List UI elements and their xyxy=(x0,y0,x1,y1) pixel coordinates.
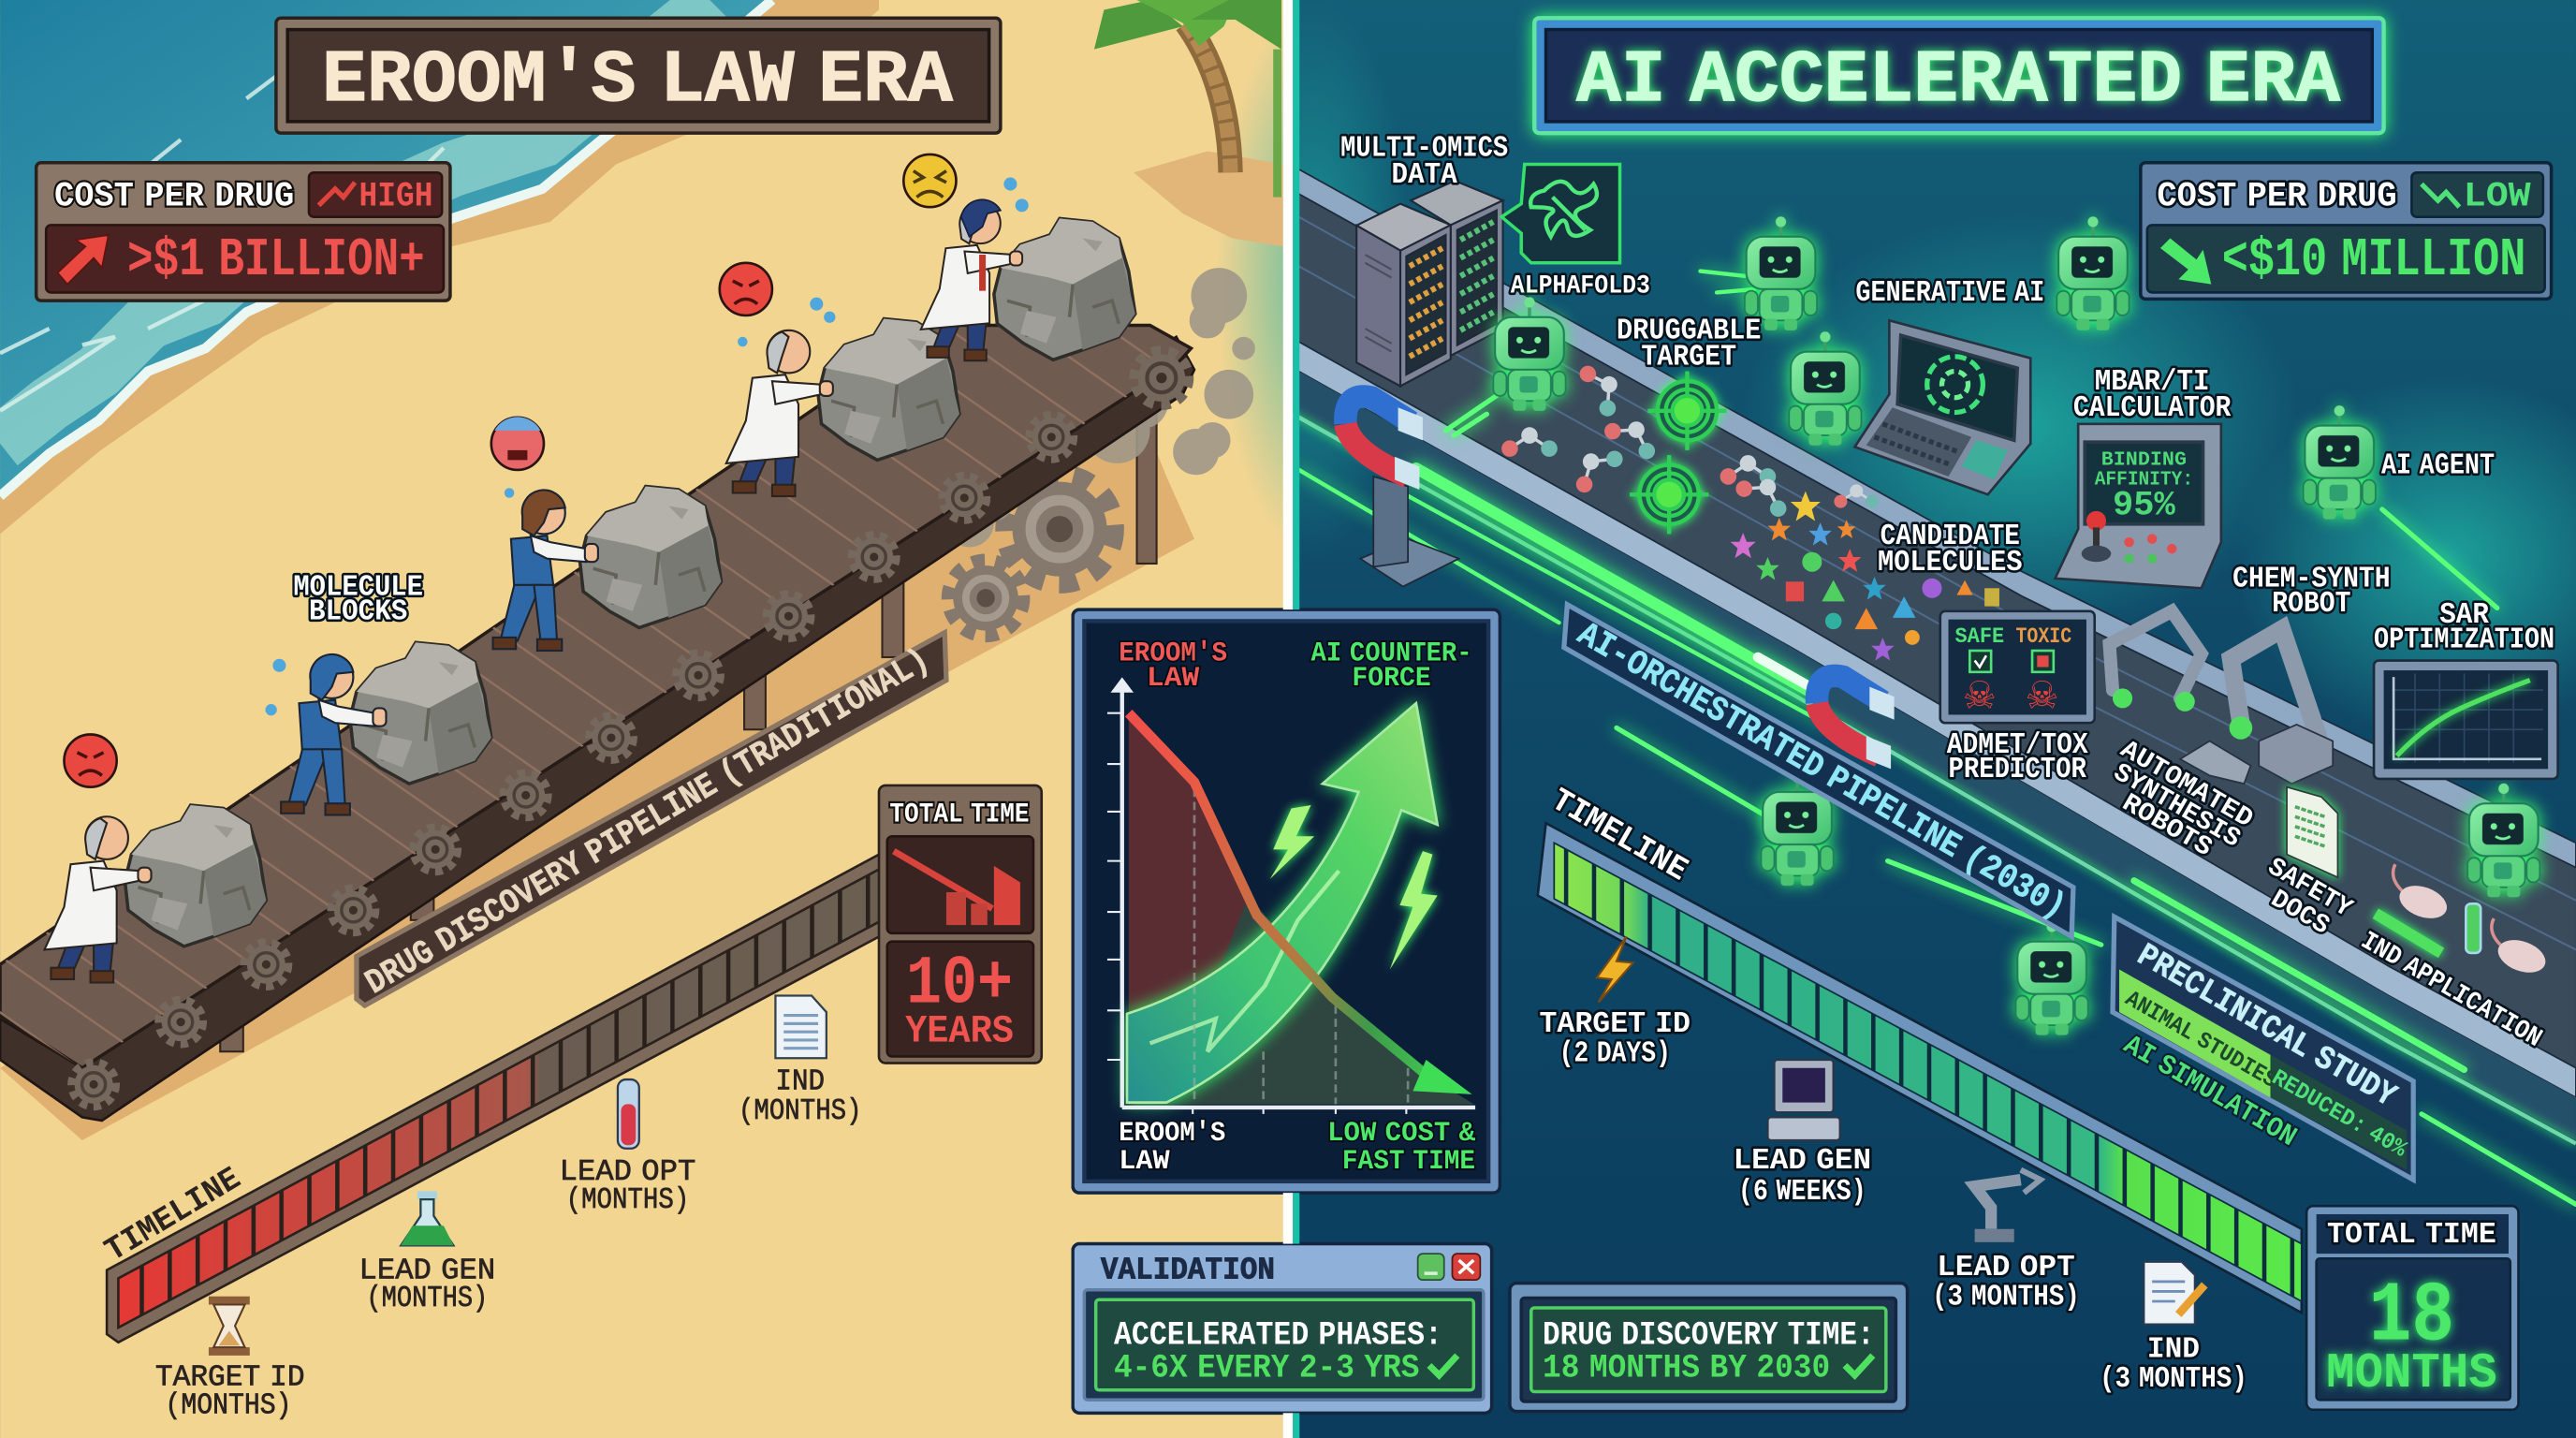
label: mbar/ti calculator xyxy=(2073,366,2231,425)
chart area: low cost fill xyxy=(1166,895,1473,1104)
title: eroom's law era: EROOM'S LAW ERA xyxy=(322,38,954,123)
icon: synthesis robot arms xyxy=(2110,611,2333,784)
chart labels: LAW xyxy=(1147,662,1199,694)
timeline: traditional: TIMELINE xyxy=(98,1160,247,1270)
panel: cost low: COST PER DRUG xyxy=(2157,177,2397,216)
label: ind months xyxy=(739,1066,862,1128)
conveyor belt surface xyxy=(0,325,1191,1068)
magnet post xyxy=(1360,477,1459,587)
label: chem-synth robot: CHEM-SYNTH xyxy=(2232,564,2391,596)
label: sar optimization: SAR xyxy=(2439,599,2489,632)
label: ind application: IND APPLICATION xyxy=(2355,927,2546,1054)
label: lead gen weeks xyxy=(1734,1145,1871,1209)
icon: alphafold3 protein xyxy=(1501,165,1620,263)
panel: cost high: COST PER DRUG xyxy=(54,177,294,216)
panel: total time AI: MONTHS xyxy=(2326,1345,2497,1401)
icon: flask xyxy=(401,1191,453,1245)
panel: cost low xyxy=(2141,163,2552,299)
label: lead gen weeks: (6 WEEKS) xyxy=(1738,1176,1866,1209)
panel: cost high: >$1 BILLION+ xyxy=(127,230,425,291)
molecules xyxy=(1501,356,1879,520)
label: target id months xyxy=(155,1361,305,1422)
support posts xyxy=(220,386,1157,1051)
workers pushing xyxy=(44,199,1022,983)
label: chem-synth robot xyxy=(2232,564,2391,621)
panel: total time traditional: YEARS xyxy=(905,1009,1014,1054)
icon: binding affinity calculator: AFFINITY: xyxy=(2095,469,2193,492)
chart labels: AI COUNTER- xyxy=(1311,638,1472,669)
label: lead gen weeks: LEAD GEN xyxy=(1734,1145,1871,1178)
icon: robot arm xyxy=(1975,1170,2041,1242)
label: ind months: (MONTHS) xyxy=(739,1095,862,1128)
sign: traditional pipeline: DRUG DISCOVERY PIPELINE (TRADITIONAL) xyxy=(359,641,937,1004)
robots xyxy=(1493,216,2539,1035)
chart labels: LOW COST & xyxy=(1327,1117,1475,1149)
label: ind months: IND xyxy=(2147,1334,2200,1367)
label: ind months: (3 MONTHS) xyxy=(2100,1363,2247,1396)
label: lead gen months: (MONTHS) xyxy=(366,1283,488,1315)
panel: cost curve chart xyxy=(1073,609,1500,1193)
conveyor side xyxy=(0,337,1194,1121)
magnets xyxy=(1345,397,1895,769)
label: target id months: TARGET ID xyxy=(155,1361,305,1394)
label: lead opt months: (MONTHS) xyxy=(566,1184,689,1217)
icon: safety docs xyxy=(2287,787,2337,877)
icon: green progress and tube xyxy=(2376,903,2481,953)
candidate molecules xyxy=(1731,492,1999,661)
chart area: eroom's law fill xyxy=(1129,713,1473,1104)
label: safety docs: SAFETY xyxy=(2262,853,2357,924)
chart labels: EROOM'S xyxy=(1119,638,1227,669)
label: admet tox predictor: PREDICTOR xyxy=(1949,754,2086,786)
label: automated synthesis robots: AUTOMATED xyxy=(2115,736,2258,834)
energy streaks xyxy=(1296,271,2576,1204)
panel: preclinical study: REDUCED: 40% xyxy=(2267,1065,2410,1164)
panel: total time AI: TOTAL TIME xyxy=(2327,1219,2496,1252)
icon: binding affinity calculator xyxy=(2056,424,2221,588)
label: automated synthesis robots: ROBOTS xyxy=(2116,789,2217,863)
rocks xyxy=(124,218,1135,946)
label: molecule blocks: BLOCKS xyxy=(309,596,407,629)
panel: total time AI: 18 xyxy=(2369,1269,2454,1365)
panel: cost high: HIGH xyxy=(359,177,433,216)
label: lead opt months xyxy=(1932,1252,2080,1313)
server racks xyxy=(1356,181,1503,386)
chart labels: FAST TIME xyxy=(1342,1145,1475,1177)
label: multi-omics data: MULTI-OMICS xyxy=(1340,133,1508,166)
label: lead opt months: LEAD OPT xyxy=(560,1156,695,1189)
sign: AI pipeline: AI-ORCHESTRATED PIPELINE (2030) xyxy=(1570,615,2072,928)
label: multi-omics data xyxy=(1340,133,1508,192)
panel: admet tox: TOXIC xyxy=(2015,624,2071,649)
label: candidate molecules: CANDIDATE xyxy=(1881,521,2020,553)
icon: generative AI computer xyxy=(1854,320,2030,494)
label: lead opt months: LEAD OPT xyxy=(1937,1252,2075,1284)
label: target id days: (2 DAYS) xyxy=(1559,1038,1671,1071)
panel: total time traditional: 10+ xyxy=(906,946,1013,1024)
label: ai simulation: AI SIMULATION xyxy=(2118,1029,2302,1153)
label: chem-synth robot: ROBOT xyxy=(2272,588,2351,621)
label: candidate molecules: MOLECULES xyxy=(1878,547,2022,580)
chart labels: EROOM'S xyxy=(1119,1117,1225,1149)
conveyor rollers xyxy=(72,352,1188,1106)
title: eroom's law era xyxy=(276,18,1001,133)
panel: admet tox: ☠ xyxy=(2025,673,2059,717)
icon: signed document xyxy=(2144,1262,2204,1325)
label: druggable target: TARGET xyxy=(1641,342,1736,374)
center divider xyxy=(1283,0,1299,1438)
chart labels xyxy=(1119,638,1475,1177)
timeline: AI: TIMELINE xyxy=(1544,782,1694,889)
face: stressed blue-red xyxy=(491,417,544,470)
background: beach xyxy=(0,0,1288,1438)
panel: cost high xyxy=(37,163,450,301)
panel: drug discovery time: 18 MONTHS BY 2030 xyxy=(1543,1350,1830,1387)
label: safety docs: DOCS xyxy=(2265,885,2334,942)
label: target id days xyxy=(1540,1008,1690,1071)
chart: cost curve xyxy=(1129,713,1472,1094)
label: target id days: TARGET ID xyxy=(1540,1008,1690,1041)
label: multi-omics data: DATA xyxy=(1392,159,1457,192)
chart: dashed markers xyxy=(1194,788,1408,1104)
label: sar optimization xyxy=(2374,599,2554,656)
icon: lightning bolt xyxy=(1597,936,1633,1003)
label: alphafold3: ALPHAFOLD3 xyxy=(1511,271,1650,301)
label: target id months: (MONTHS) xyxy=(165,1389,292,1422)
icon: binding affinity calculator: BINDING xyxy=(2101,449,2187,472)
chart labels: LAW xyxy=(1119,1145,1170,1177)
palm tree xyxy=(1094,0,1283,246)
title: ai accelerated era: AI ACCELERATED ERA xyxy=(1576,38,2341,123)
panel: preclinical study: ANIMAL STUDIES xyxy=(2120,987,2281,1094)
timeline: AI xyxy=(1538,782,2302,1313)
face: yellow xyxy=(903,154,956,207)
label: molecule blocks: MOLECULE xyxy=(293,571,423,604)
label: automated synthesis robots xyxy=(2108,736,2258,863)
icon: hourglass xyxy=(209,1297,250,1356)
panel: cost low: LOW xyxy=(2464,177,2532,216)
sweat drops xyxy=(265,178,1029,715)
panel: total time traditional: TOTAL TIME xyxy=(889,799,1030,830)
panel: validation xyxy=(1073,1244,1492,1413)
title: ai accelerated era xyxy=(1534,18,2384,133)
panel: drug discovery time xyxy=(1510,1284,1908,1412)
icon: document xyxy=(775,996,827,1058)
label: mbar/ti calculator: CALCULATOR xyxy=(2073,392,2231,425)
timeline: traditional xyxy=(98,853,883,1343)
label: ai agent: AI AGENT xyxy=(2381,449,2495,482)
panel: total time traditional xyxy=(879,785,1042,1064)
smoke xyxy=(944,268,1255,547)
big gears xyxy=(949,477,1112,634)
label: druggable target xyxy=(1617,315,1761,374)
panel: admet tox: SAFE xyxy=(1955,624,2004,649)
panel: preclinical study xyxy=(2113,917,2413,1180)
background: digital sea xyxy=(1216,0,2576,1438)
conveyor: AI belt xyxy=(1293,166,2576,1143)
icon: lab mice xyxy=(2393,864,2550,978)
icon: test tube xyxy=(618,1079,639,1149)
label: lead gen months xyxy=(359,1255,495,1315)
face: angry red 1 xyxy=(65,734,117,787)
label: candidate molecules xyxy=(1878,521,2022,580)
icon: binding affinity calculator: 95% xyxy=(2113,486,2176,525)
chart labels: FORCE xyxy=(1352,662,1431,694)
label: molecule blocks xyxy=(293,571,423,629)
icon: computer xyxy=(1767,1060,1840,1140)
label: automated synthesis robots: SYNTHESIS xyxy=(2108,758,2245,855)
panel: drug discovery time: DRUG DISCOVERY TIME: xyxy=(1543,1317,1875,1355)
conveyor shadow xyxy=(0,394,1194,1140)
label: lead gen months: LEAD GEN xyxy=(359,1255,495,1287)
label: lead opt months: (3 MONTHS) xyxy=(1932,1281,2080,1313)
panel: preclinical study: PRECLINICAL STUDY xyxy=(2130,937,2403,1116)
ocean and shoreline xyxy=(0,0,879,534)
label: admet tox predictor xyxy=(1947,729,2088,786)
label: lead opt months xyxy=(560,1156,695,1217)
label: druggable target: DRUGGABLE xyxy=(1617,315,1761,348)
label: ind months xyxy=(2100,1334,2247,1396)
chart: AI counter-force arrow xyxy=(1127,703,1438,1103)
label: mbar/ti calculator: MBAR/TI xyxy=(2095,366,2210,399)
panel: validation: VALIDATION xyxy=(1101,1253,1275,1288)
label: admet tox predictor: ADMET/TOX xyxy=(1947,729,2088,762)
label: generative AI: GENERATIVE AI xyxy=(1855,277,2044,310)
panel: admet tox: ☠ xyxy=(1963,673,1997,717)
panel: admet tox xyxy=(1940,611,2095,723)
label: ind months: IND xyxy=(775,1066,825,1099)
chart: sar optimization xyxy=(2374,661,2558,779)
icon: targets xyxy=(1630,372,1727,534)
panel: validation: 4-6X EVERY 2-3 YRS xyxy=(1114,1350,1419,1387)
panel: validation: ACCELERATED PHASES: xyxy=(1114,1317,1442,1355)
face: angry red 2 xyxy=(720,263,772,315)
panel: total time AI xyxy=(2306,1206,2519,1410)
chart: axes xyxy=(1107,679,1475,1114)
